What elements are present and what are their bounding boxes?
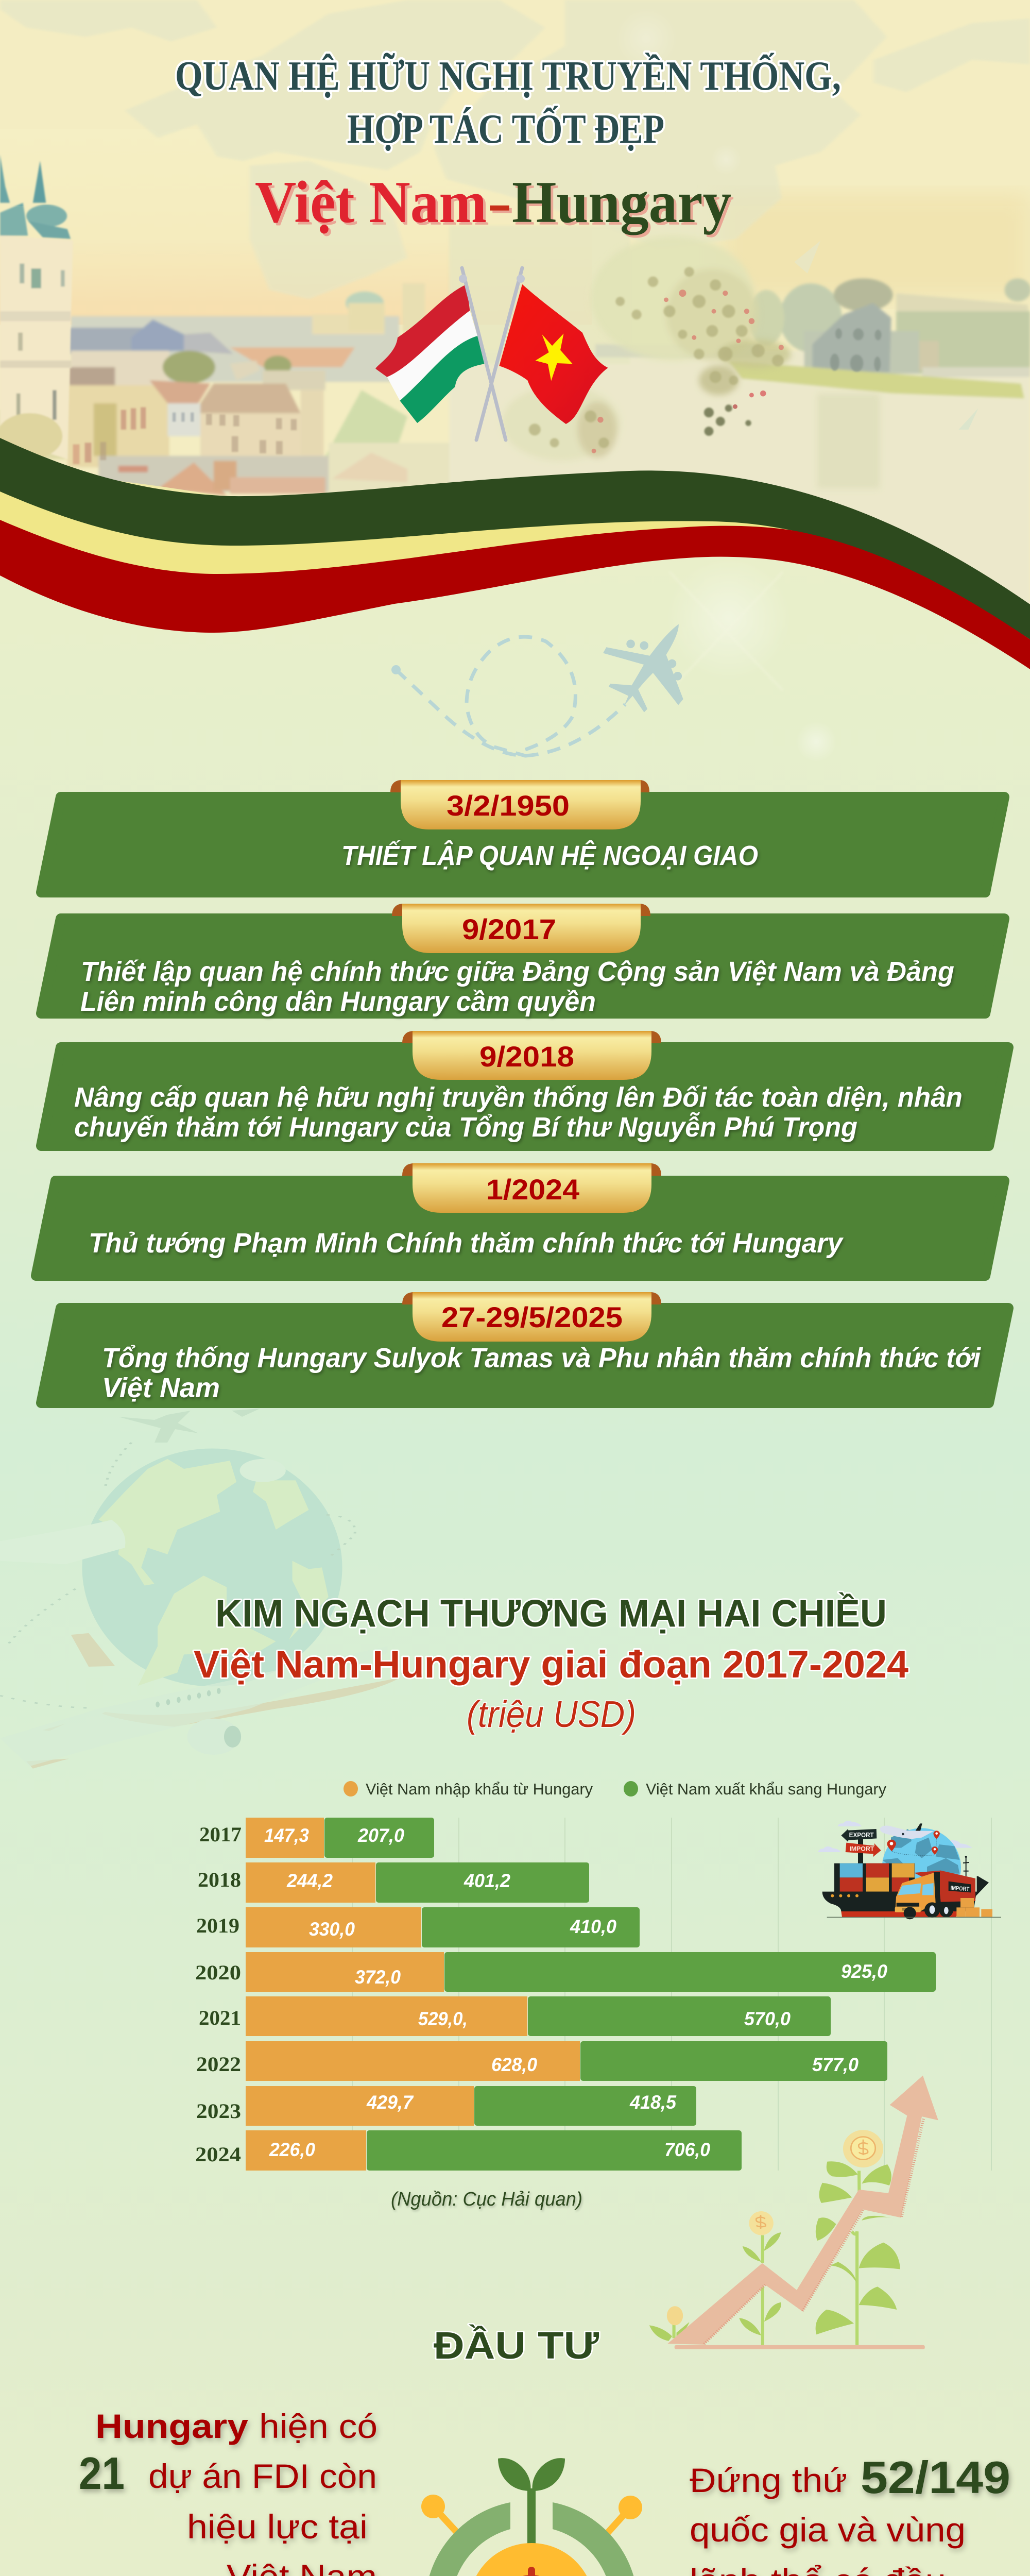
bar 2024: 226,0 <box>269 2139 315 2160</box>
photo: Hungarian city <box>0 155 448 496</box>
bar 2018 <box>198 1862 589 1903</box>
event 27-29/5/2025: 27-29/5/2025 <box>441 1301 623 1333</box>
bar chart <box>195 1818 991 2171</box>
faint small airplane <box>118 1409 260 1443</box>
event 1950: THIẾT LẬP QUAN HỆ NGOẠI GIAO <box>341 840 758 871</box>
icon: airplane <box>603 624 683 713</box>
subtitle: Việt Nam-Hungary: Hungary <box>512 170 731 235</box>
bar 2022 <box>196 2041 887 2081</box>
icon: cargo ship and truck <box>818 1821 1001 1919</box>
event 1/2024: 1/2024 <box>486 1173 579 1206</box>
flight path decoration <box>391 624 683 756</box>
ribbon: green yellow red wave <box>0 438 1030 669</box>
panel: timeline <box>36 780 1008 1403</box>
icon: money plant <box>421 2458 642 2576</box>
text: FDI projects: hiện có <box>259 2407 377 2445</box>
bar 2022: 2022 <box>196 2053 241 2076</box>
bar 2019: 330,0 <box>309 1919 355 1940</box>
bar chart legend: Việt Nam xuất khẩu sang Hungary <box>646 1780 886 1798</box>
event 1/2024 <box>36 1163 1004 1276</box>
event 1950 <box>41 780 1004 892</box>
text: FDI projects: Hungary <box>95 2407 248 2445</box>
bar 2020: 2020 <box>195 1961 241 1984</box>
decorative sparkle <box>667 556 837 762</box>
bar 2019: 2019 <box>196 1914 239 1937</box>
soft photo wash <box>0 206 891 492</box>
icon: cargo ship and truck: EXPORT <box>849 1832 874 1839</box>
event 9/2018 <box>41 1031 1008 1146</box>
Vietnam flag <box>499 284 608 424</box>
event 9/2018: 9/2018 <box>479 1040 574 1073</box>
icon: cargo ship and truck: IMPORT <box>950 1885 970 1893</box>
bar 2023: 2023 <box>196 2099 241 2123</box>
tree with red flowers <box>502 235 791 461</box>
bar chart legend <box>344 1780 886 1798</box>
icon: cargo ship and truck: IMPORT <box>849 1845 874 1853</box>
flag poles <box>462 268 522 440</box>
event 1950: 3/2/1950 <box>447 789 570 822</box>
bar 2023: 418,5 <box>629 2092 677 2113</box>
bar 2019: 410,0 <box>570 1916 616 1937</box>
event 9/2017: 9/2017 <box>462 913 556 945</box>
event 9/2017 <box>41 904 1004 1017</box>
bar 2021 <box>199 1996 831 2036</box>
event 27-29/5/2025 <box>41 1292 1008 1403</box>
header photo collage <box>0 1 1030 496</box>
bar 2024: 2024 <box>195 2143 241 2166</box>
investment heading: ĐẦU TƯ <box>434 2324 599 2367</box>
text: FDI projects <box>79 2407 377 2576</box>
bar 2021: 2021 <box>199 2006 241 2029</box>
event 9/2017: Liên minh công dân Hungary cầm quyền <box>80 986 596 1017</box>
bar 2021: 529,0, <box>418 2008 468 2029</box>
bar 2023: 429,7 <box>366 2092 414 2113</box>
trade heading <box>194 1592 908 1735</box>
bar 2022: 577,0 <box>812 2054 859 2075</box>
event 27-29/5/2025: Tổng thống Hungary Sulyok Tamas và Phu nhân thăm chính thức tới <box>102 1343 981 1374</box>
bar 2020: 925,0 <box>841 1961 887 1982</box>
bar 2020 <box>195 1952 936 1992</box>
bar 2021: 570,0 <box>744 2008 791 2029</box>
bar 2024 <box>195 2130 742 2171</box>
event 9/2017: Thiết lập quan hệ chính thức giữa Đảng Cộng sản Việt Nam và Đảng <box>81 956 954 987</box>
text: rank 52/149: quốc gia và vùng <box>690 2511 966 2549</box>
text: FDI projects: hiệu lực tại <box>187 2507 368 2546</box>
chart source: (Nguồn: Cục Hải quan) <box>391 2189 582 2210</box>
church <box>0 155 73 459</box>
title: HỢP TÁC TỐT ĐẸP <box>347 106 664 152</box>
bar 2017: 147,3 <box>264 1825 309 1846</box>
bar 2023 <box>196 2086 696 2126</box>
bar chart legend: Việt Nam nhập khẩu từ Hungary <box>366 1780 593 1798</box>
bar 2018: 401,2 <box>464 1870 510 1891</box>
world map watermark <box>0 0 1030 299</box>
bar 2019 <box>196 1907 640 1947</box>
text: rank 52/149: 52/149 <box>861 2452 1010 2503</box>
faint map marks <box>794 241 820 274</box>
photo: Hanoi lake <box>449 226 1030 614</box>
faint globe and airplane behind trade heading <box>0 1443 401 1769</box>
sky sparkles <box>615 8 742 175</box>
title: QUAN HỆ HỮU NGHỊ TRUYỀN THỐNG, <box>175 53 841 99</box>
subtitle: Việt Nam-Hungary: - <box>487 170 512 235</box>
subtitle: Việt Nam-Hungary: Việt Nam <box>255 170 487 235</box>
icon: crossed flags <box>375 268 608 440</box>
trade heading: (triệu USD) <box>467 1694 636 1735</box>
bar 2017: 207,0 <box>357 1825 404 1846</box>
title <box>175 53 841 152</box>
bar 2022: 628,0 <box>491 2054 537 2075</box>
bar 2017: 2017 <box>199 1823 242 1846</box>
bar 2020: 372,0 <box>355 1967 401 1988</box>
text: rank 52/149 <box>690 2452 1010 2576</box>
text: rank 52/149: Đứng thứ <box>690 2461 847 2499</box>
text: FDI projects: dự án FDI còn <box>148 2457 377 2495</box>
bar 2024: 706,0 <box>664 2139 710 2160</box>
bar 2018: 244,2 <box>286 1870 333 1891</box>
event 27-29/5/2025: Việt Nam <box>102 1372 220 1403</box>
bar 2017 <box>199 1818 434 1858</box>
trade heading: KIM NGẠCH THƯƠNG MẠI HAI CHIỀU <box>215 1592 887 1635</box>
bar 2018: 2018 <box>198 1868 241 1891</box>
event 9/2018: chuyến thăm tới Hungary của Tổng Bí thư Nguyễn Phú Trọng <box>74 1112 857 1143</box>
text: FDI projects: 21 <box>79 2448 125 2499</box>
trade heading: Việt Nam-Hungary giai đoạn 2017-2024 <box>194 1643 908 1686</box>
icon: rising arrow with coin plants <box>649 2076 938 2349</box>
Hungary flag <box>375 284 484 423</box>
subtitle: Việt Nam-Hungary <box>255 170 731 235</box>
event 1/2024: Thủ tướng Phạm Minh Chính thăm chính thức tới Hungary <box>89 1228 844 1259</box>
event 9/2018: Nâng cấp quan hệ hữu nghị truyền thống lên Đối tác toàn diện, nhân <box>74 1082 963 1113</box>
